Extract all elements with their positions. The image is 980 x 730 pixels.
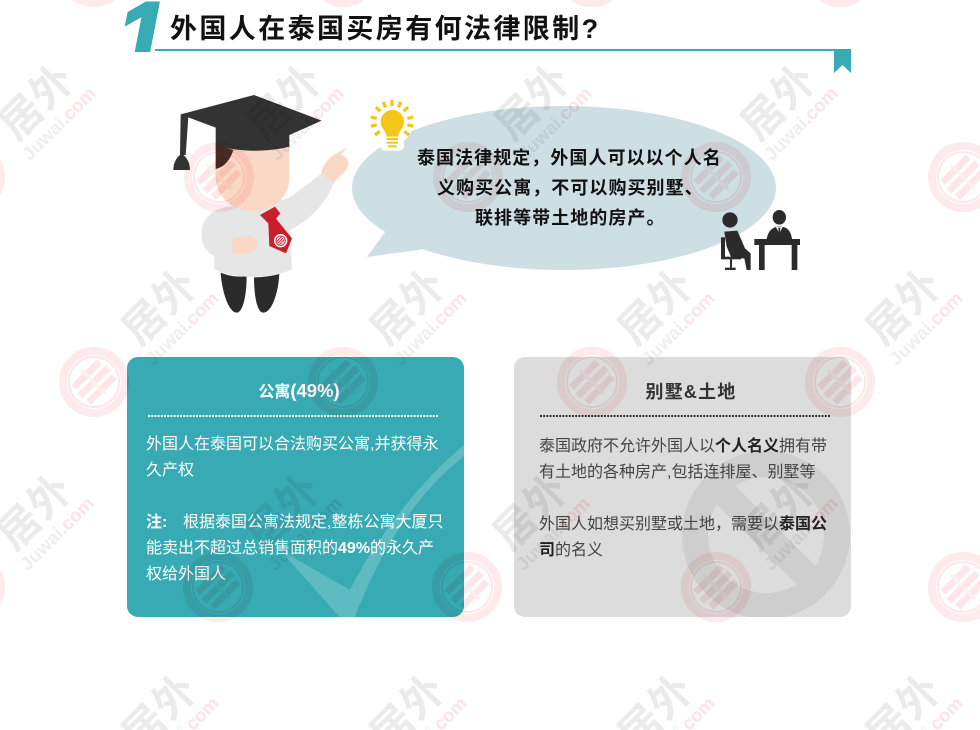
panel: villa and land (514, 357, 851, 617)
apartment text: 久产权 (146, 461, 194, 479)
speech bubble (352, 106, 776, 270)
speech text (417, 147, 722, 228)
villa text: 外国人如想买别墅或土地，需要以泰国公 (539, 514, 827, 533)
villa text: 司的名义 (539, 541, 603, 559)
watermark: Juwai wordmarks and seals: 居外 (113, 260, 207, 354)
watermark: Juwai wordmarks and seals: Juwai.com (16, 492, 98, 574)
icon: check mark (280, 440, 470, 622)
body and raised arm (202, 173, 335, 277)
apartment text: 外国人在泰国可以合法购买公寓,并获得永 (146, 435, 438, 453)
title: 外国人在泰国买房有何法律限制? (170, 14, 600, 44)
watermark: Juwai wordmarks and seals: Juwai.com (514, 82, 596, 164)
villa text: 泰国政府不允许外国人以个人名义拥有带 (539, 437, 827, 455)
watermark: Juwai wordmarks and seals: 居外 (857, 260, 951, 354)
watermark: Juwai wordmarks and seals: Juwai.com (760, 492, 842, 574)
speech text: 泰国法律规定，外国人可以以个人名 (417, 147, 722, 168)
panel: apartment (127, 357, 470, 622)
speech text: 义购买公寓，不可以购买别墅、 (437, 177, 704, 198)
apartment text (146, 435, 443, 583)
watermark: Juwai wordmarks and seals: 居外 (732, 465, 826, 559)
icon: prohibition sign (695, 464, 837, 606)
watermark: Juwai wordmarks and seals: Juwai.com (264, 492, 346, 574)
watermark: Juwai wordmarks and seals: 居外 (609, 260, 703, 354)
apartment text: 注: (146, 512, 167, 531)
villa heading: 别墅&土地 (646, 382, 736, 402)
graduation cap (173, 95, 322, 170)
watermark: Juwai wordmarks and seals: 居外 (238, 55, 332, 149)
apartment heading: 公寓(49%) (258, 380, 340, 401)
watermark: Juwai wordmarks and seals: Juwai.com (512, 492, 594, 574)
watermark: Juwai wordmarks and seals: Juwai.com (637, 287, 719, 369)
illustration: teacher with graduation cap (173, 95, 348, 313)
watermark: Juwai wordmarks and seals: 居外 (486, 55, 580, 149)
apartment text: 根据泰国公寓法规定,整栋公寓大厦只 (183, 513, 443, 531)
watermark: Juwai wordmarks and seals: 居外 (484, 465, 578, 559)
icon: light bulb (371, 100, 413, 151)
head (216, 143, 289, 211)
watermark: Juwai wordmarks and seals: Juwai.com (389, 287, 471, 369)
villa text: 有土地的各种房产,包括连排屋、别墅等 (539, 463, 815, 481)
hair (216, 145, 233, 169)
watermark: Juwai wordmarks and seals: 居外 (361, 260, 455, 354)
necktie (260, 207, 292, 253)
watermark: Juwai wordmarks and seals: Juwai.com (266, 82, 348, 164)
dotted divider (148, 415, 438, 417)
villa text (539, 437, 827, 559)
apartment text: 能卖出不超过总销售面积的49%的永久产 (146, 539, 434, 557)
speech text: 联排等带土地的房产。 (475, 207, 666, 228)
watermark: Juwai wordmarks and seals: Juwai.com (18, 82, 100, 164)
title rule with ribbon (155, 49, 851, 73)
dotted divider (540, 415, 830, 417)
watermark: Juwai wordmarks and seals: 居外 (732, 55, 826, 149)
watermark: Juwai wordmarks and seals: Juwai.com (760, 82, 842, 164)
apartment text: 权给外国人 (146, 565, 226, 583)
raised hand (321, 147, 348, 182)
watermark: Juwai wordmarks and seals: Juwai.com (141, 287, 223, 369)
icon: two people at a desk (721, 210, 800, 270)
legs (221, 273, 279, 313)
lower hand (232, 236, 257, 254)
watermark: Juwai wordmarks and seals: 居外 (236, 465, 330, 559)
watermark: Juwai wordmarks and seals: Juwai.com (885, 287, 967, 369)
